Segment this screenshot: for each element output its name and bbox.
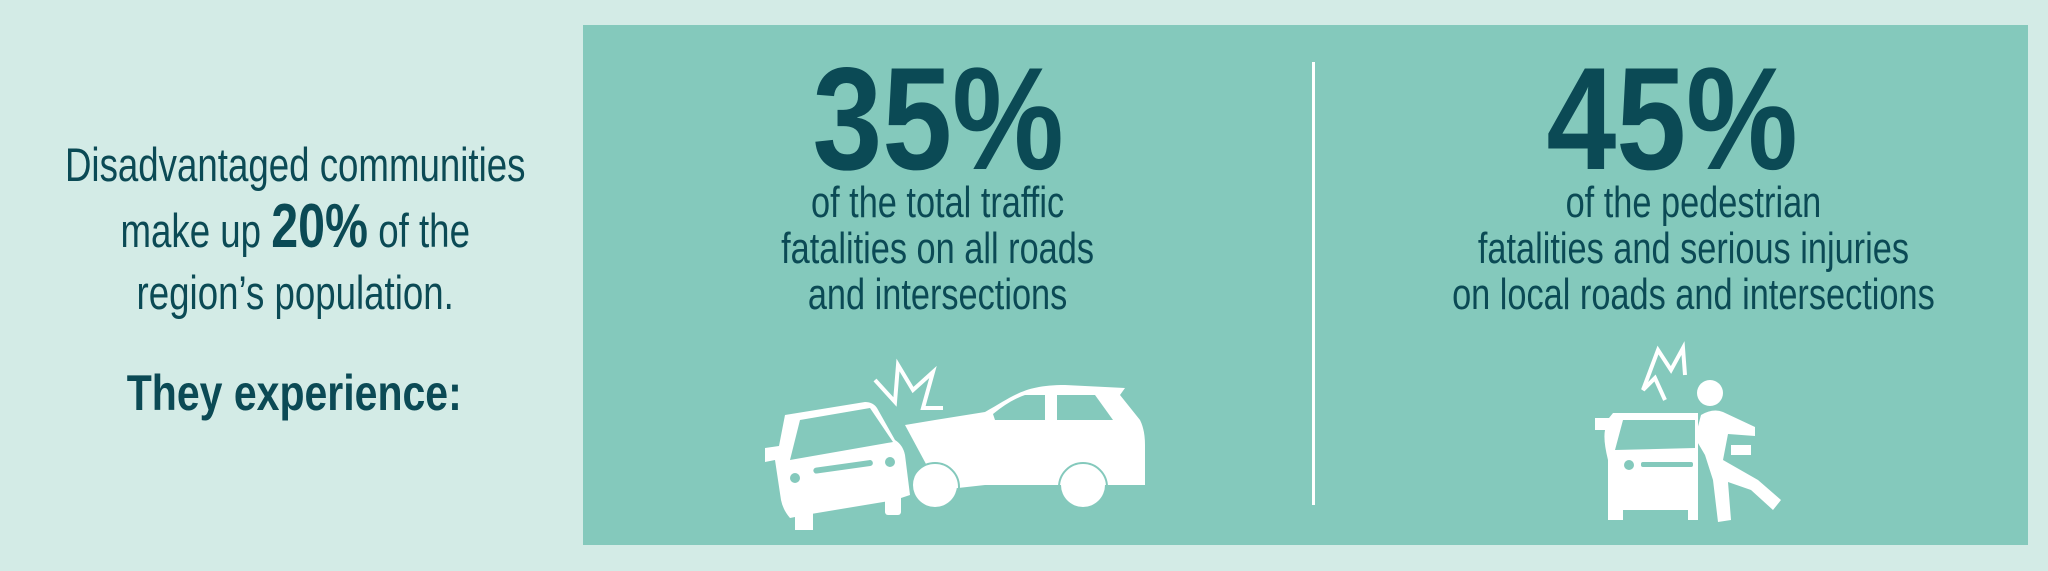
heading: they experience: They experience: — [127, 365, 461, 421]
text block: intro: Disadvantaged communities — [65, 138, 525, 191]
text: 45% description: fatalities and serious injuries — [1478, 224, 1909, 273]
icon: car crash — [765, 358, 1145, 530]
text: 35% description — [782, 178, 1094, 319]
divider — [1312, 62, 1315, 505]
text block: intro: make up 20% of the — [120, 192, 470, 261]
text: 35% description: fatalities on all roads — [782, 224, 1094, 273]
stat: 45%: 45% — [1546, 37, 1798, 200]
icon: pedestrian hit by car — [1595, 341, 1781, 522]
text block: intro: region’s population. — [137, 266, 454, 319]
stat: 35%: 35% — [812, 37, 1064, 200]
text: 45% description — [1452, 178, 1935, 319]
text block: intro — [65, 138, 525, 319]
text: 35% description: and intersections — [808, 270, 1068, 319]
text: 45% description: on local roads and intersections — [1452, 270, 1935, 319]
text: 35% description: of the total traffic — [811, 178, 1065, 227]
text: 45% description: of the pedestrian — [1566, 178, 1821, 227]
panel: stats background — [583, 25, 2028, 545]
